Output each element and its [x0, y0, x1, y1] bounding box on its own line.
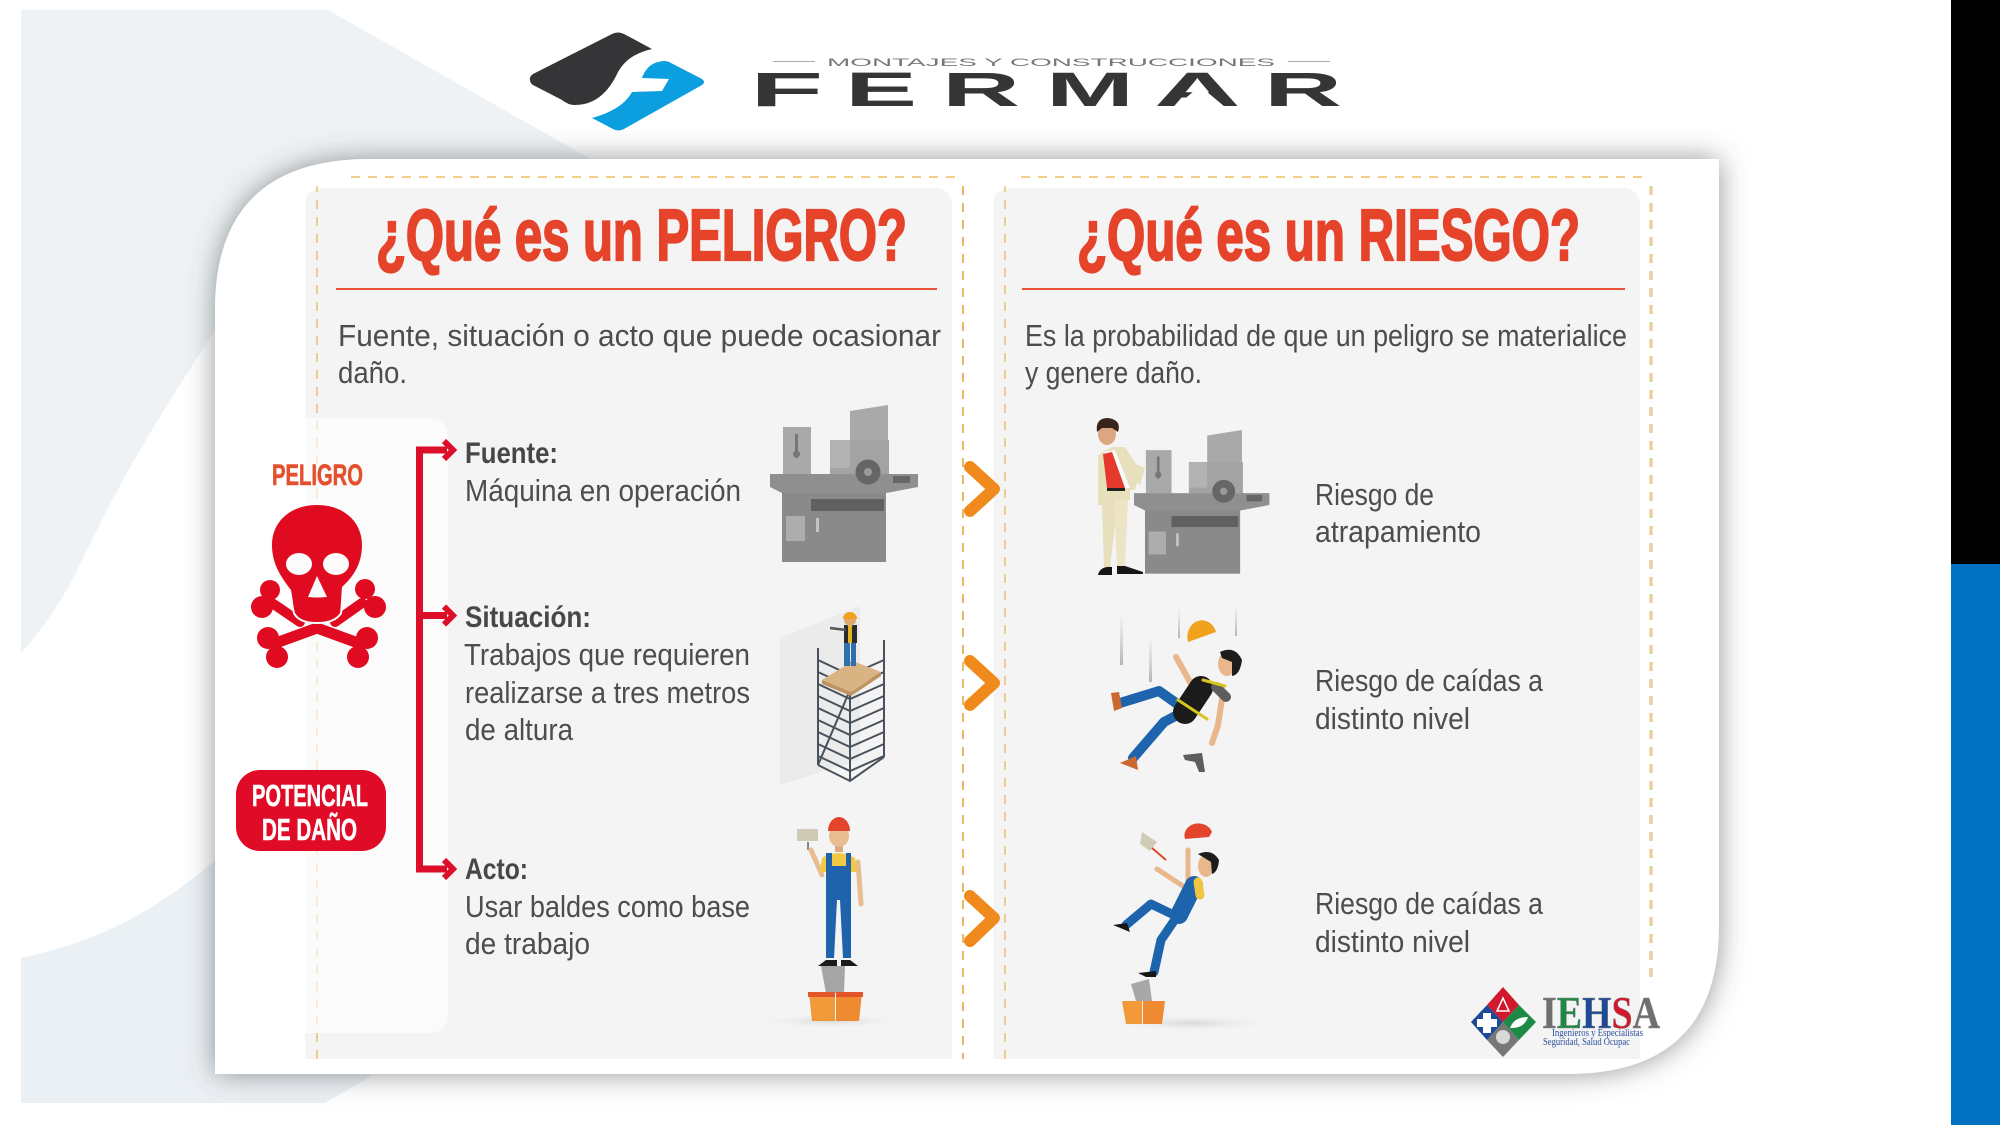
illustration: worker on buckets — [767, 817, 893, 1027]
definition: y genere daño. — [1025, 355, 1202, 390]
item: acto: de trabajo — [465, 926, 590, 961]
wordmark: A — [1154, 63, 1241, 117]
dashed frame — [317, 177, 963, 1059]
item: situación: realizarse a tres metros — [465, 675, 750, 710]
risk text: caídas 1: distinto nivel — [1315, 701, 1470, 736]
definition — [1025, 318, 1627, 390]
heading rule — [336, 288, 937, 290]
item: fuente: Fuente: — [465, 437, 558, 470]
illustration: scaffold — [780, 606, 884, 785]
background shape top — [21, 10, 640, 653]
bracket arrows — [420, 441, 453, 878]
logo: IEHSA — [1471, 987, 1660, 1057]
item: situación: Trabajos que requieren — [464, 637, 750, 672]
panel: riesgo — [993, 177, 1651, 1059]
logo tagline — [1543, 1028, 1643, 1048]
wordmark: R — [942, 62, 1020, 116]
main card — [215, 159, 1719, 1074]
badge: potencial de daño — [236, 770, 386, 851]
risk text: caídas 1 — [1315, 663, 1544, 736]
item: fuente — [465, 437, 741, 508]
definition — [338, 318, 941, 390]
item: acto: Acto: — [465, 853, 528, 886]
illustration: man caught in machine — [1097, 418, 1269, 575]
logo wordmark: IEHSA — [1542, 987, 1660, 1038]
badge: potencial de daño: DE DAÑO — [262, 812, 357, 847]
left column overlay — [305, 418, 448, 1033]
risk text: caídas 2 — [1315, 886, 1544, 959]
logo diamond — [1471, 987, 1536, 1057]
wordmark: F — [750, 63, 823, 117]
risk text: caídas 1: Riesgo de caídas a — [1315, 663, 1544, 698]
risk text: atrapamiento: atrapamiento — [1315, 514, 1481, 549]
item: situación — [464, 601, 750, 747]
wordmark: M — [1046, 63, 1134, 117]
dashed frame — [1005, 177, 1651, 1059]
item: situación: Situación: — [465, 601, 591, 634]
heading rule — [1022, 288, 1625, 290]
heading: ¿Qué es un RIESGO? — [1077, 196, 1580, 276]
definition: daño. — [338, 355, 407, 390]
item: acto: Usar baldes como base — [465, 889, 750, 924]
definition: Fuente, situación o acto que puede ocasionar — [338, 318, 941, 353]
side bar blue — [1951, 564, 2000, 1125]
icon: skull and crossbones — [251, 505, 386, 668]
badge: potencial de daño: POTENCIAL — [252, 778, 368, 813]
illustration: worker falling with drill — [1111, 604, 1242, 772]
heading: ¿Qué es un PELIGRO? — [376, 196, 907, 276]
side bar black — [1951, 0, 2000, 564]
panel: peligro — [236, 177, 963, 1059]
wordmark: E — [845, 62, 917, 116]
panel background — [993, 188, 1640, 1059]
panel background — [305, 188, 952, 1059]
label: peligro: PELIGRO — [272, 459, 363, 492]
illustration: machine — [770, 405, 918, 562]
illustration: worker falling from buckets — [1113, 823, 1264, 1030]
logo mark blue — [592, 61, 704, 130]
risk text: caídas 2: distinto nivel — [1315, 924, 1470, 959]
arrows: orange chevrons — [970, 467, 994, 941]
definition: Es la probabilidad de que un peligro se materialice — [1025, 318, 1627, 353]
background shape bottom — [21, 852, 373, 1103]
item: situación: de altura — [465, 712, 574, 747]
logo tagline: Seguridad, Salud Ocupac — [1543, 1037, 1630, 1048]
logo mark dark — [530, 32, 652, 105]
company logo — [530, 32, 1342, 130]
tagline: MONTAJES Y CONSTRUCCIONES — [827, 57, 1275, 69]
wordmark — [750, 62, 1342, 117]
item: acto — [465, 853, 750, 961]
risk text: caídas 2: Riesgo de caídas a — [1315, 886, 1544, 921]
logo tagline: Ingenieros y Especialistas — [1552, 1028, 1643, 1039]
item: fuente: Máquina en operación — [465, 473, 741, 508]
risk text: atrapamiento: Riesgo de — [1315, 477, 1434, 512]
wordmark: R — [1264, 62, 1342, 116]
risk text: atrapamiento — [1315, 477, 1481, 549]
